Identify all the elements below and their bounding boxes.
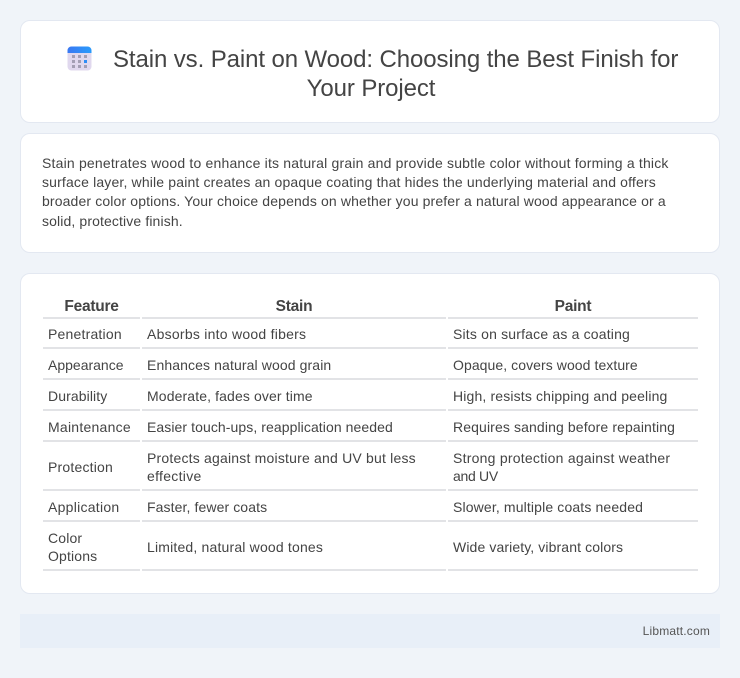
row: Color Options: Options — [48, 548, 97, 564]
intro text: Stain penetrates wood to enhance its natural grain and provide subtle color without forming a thick — [42, 155, 669, 171]
row: Application: Application — [48, 499, 119, 515]
table header: Paint — [555, 298, 591, 315]
row: Penetration: Penetration — [48, 326, 122, 342]
row: Protection: Protects against moisture and UV but less — [147, 450, 416, 466]
row: Maintenance: Requires sanding before repainting — [453, 419, 675, 435]
row: Protection — [48, 450, 670, 484]
table header: Feature — [64, 298, 119, 315]
row: Protection: Protection — [48, 459, 113, 475]
table header: Stain — [276, 298, 312, 315]
row: Appearance: Enhances natural wood grain — [147, 357, 331, 373]
title: Your Project — [307, 75, 435, 102]
comparison table — [43, 298, 698, 571]
row: Protection: and UV — [453, 468, 498, 484]
row: Color Options: Wide variety, vibrant colors — [453, 539, 623, 555]
row: Application — [48, 499, 643, 515]
row: Appearance — [48, 357, 638, 373]
row: Maintenance: Easier touch-ups, reapplication needed — [147, 419, 393, 435]
row: Durability: High, resists chipping and peeling — [453, 388, 667, 404]
row: Color Options: Color — [48, 530, 82, 546]
row: Appearance: Opaque, covers wood texture — [453, 357, 638, 373]
intro text: solid, protective finish. — [42, 213, 183, 229]
row: Maintenance: Maintenance — [48, 419, 131, 435]
intro card — [20, 133, 720, 253]
intro text — [42, 155, 669, 229]
footer credit: Libmatt.com — [643, 624, 710, 638]
intro text: broader color options. Your choice depends on whether you prefer a natural wood appearance or a — [42, 193, 666, 209]
title: Stain vs. Paint on Wood: Choosing the Best Finish for — [113, 46, 678, 73]
table header — [64, 298, 592, 315]
row: Application: Faster, fewer coats — [147, 499, 267, 515]
table card — [20, 273, 720, 594]
row: Color Options: Limited, natural wood tones — [147, 539, 323, 555]
row: Color Options — [48, 530, 623, 564]
row: Protection: effective — [147, 468, 202, 484]
row: Durability: Durability — [48, 388, 107, 404]
intro text: surface layer, while paint creates an opaque coating that hides the underlying material and offers — [42, 174, 656, 190]
row: Penetration: Sits on surface as a coating — [453, 326, 630, 342]
row: Protection: Strong protection against weather — [453, 450, 670, 466]
row: Appearance: Appearance — [48, 357, 124, 373]
icon: calendar — [68, 46, 92, 70]
title — [113, 46, 678, 102]
row: Durability — [48, 388, 667, 404]
row: Maintenance — [48, 419, 675, 435]
header card — [20, 20, 720, 123]
row: Durability: Moderate, fades over time — [147, 388, 313, 404]
footer — [20, 614, 720, 648]
row: Application: Slower, multiple coats needed — [453, 499, 643, 515]
row: Penetration — [48, 326, 630, 342]
row: Penetration: Absorbs into wood fibers — [147, 326, 306, 342]
